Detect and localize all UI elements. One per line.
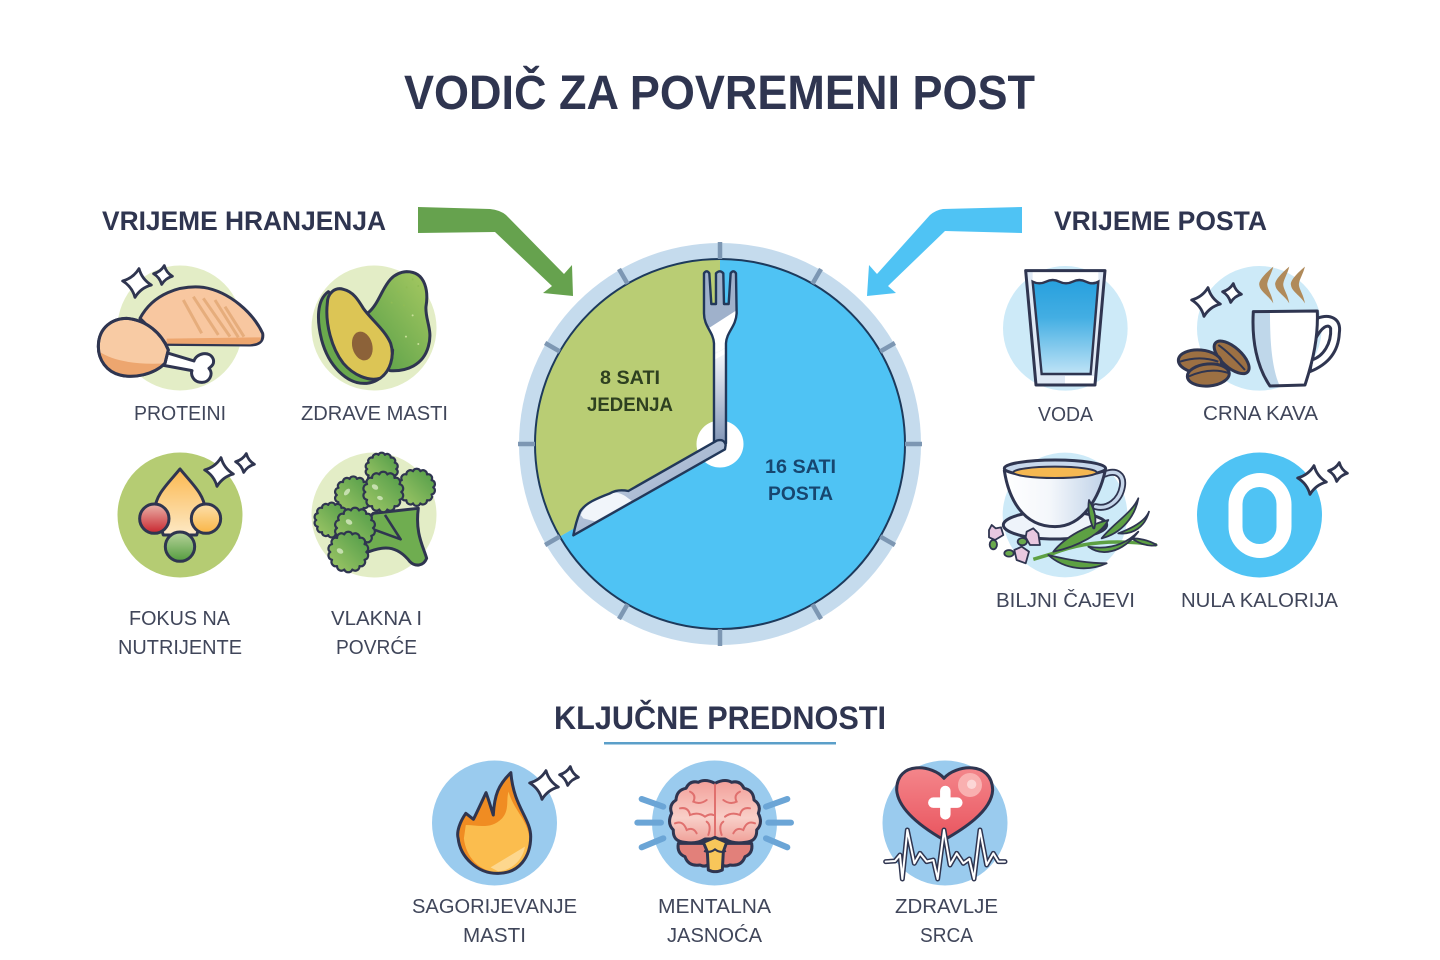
item: zero calories: [1181, 452, 1349, 612]
label: 16 hours fasting: POSTA: [768, 484, 833, 505]
label: 8 hours eating: JEDENJA: [587, 395, 673, 416]
label: healthy fats: ZDRAVE MASTI: [301, 403, 448, 425]
panel: key benefits: [412, 700, 1008, 947]
item: water: [1003, 266, 1128, 426]
icon: tea cup and herbs: [989, 453, 1157, 577]
label: fibre and vegetables: POVRĆE: [336, 636, 417, 659]
icon: glass of water: [1003, 266, 1128, 391]
icon: avocado: [312, 266, 436, 390]
item: nutrient focus: [118, 452, 256, 659]
label: fibre and vegetables: VLAKNA I: [331, 608, 422, 630]
label: 8 hours eating: 8 SATI: [600, 368, 660, 389]
arrow: green eating arrow: [418, 207, 573, 296]
label: water: VODA: [1038, 404, 1094, 426]
item: fibre and vegetables: [312, 452, 436, 659]
item: healthy fats: [301, 266, 448, 425]
label: mental clarity: [658, 896, 772, 947]
item: fat burning: [412, 760, 580, 947]
label: herbal teas: BILJNI ČAJEVI: [996, 589, 1135, 612]
label: nutrient focus: [118, 608, 242, 659]
icon: knife hand: [573, 440, 726, 535]
panel: eating time: [98, 206, 448, 659]
label: fat burning: MASTI: [463, 925, 526, 947]
heading: key benefits: KLJUČNE PREDNOSTI: [554, 700, 886, 736]
clock hands: fork and knife: [573, 271, 737, 535]
icon: coffee mug and beans: [1177, 266, 1340, 391]
label: fibre and vegetables: [331, 608, 422, 659]
label: black coffee: CRNA KAVA: [1203, 403, 1319, 425]
icon: nutrient drop: [118, 452, 256, 578]
label: nutrient focus: NUTRIJENTE: [118, 637, 242, 659]
label: zero calories: NULA KALORIJA: [1181, 590, 1339, 612]
label: mental clarity: JASNOĆA: [667, 924, 763, 947]
arrow: blue fasting arrow: [867, 207, 1022, 296]
label: heart health: [895, 896, 998, 947]
icon: broccoli: [312, 452, 436, 578]
panel: fasting time: [989, 206, 1349, 612]
icon: flame: [432, 760, 580, 886]
label: nutrient focus: FOKUS NA: [129, 608, 231, 630]
clock outer ring: [519, 243, 921, 645]
label: 8 hours eating: [587, 368, 673, 416]
item: black coffee: [1177, 266, 1340, 425]
icon: chicken: [98, 264, 263, 390]
item: herbal teas: [989, 453, 1157, 612]
chart: 16:8 fasting clock: [518, 242, 922, 646]
label: proteins: PROTEINI: [134, 403, 226, 425]
icon: brain: [637, 760, 791, 886]
title: VODIČ ZA POVREMENI POST: [404, 65, 1035, 120]
label: heart health: SRCA: [920, 925, 974, 947]
label: fat burning: [412, 896, 577, 947]
item: proteins: [98, 264, 263, 425]
heading: fasting time: VRIJEME POSTA: [1054, 206, 1267, 236]
segment: 16 hours fasting: [560, 259, 905, 629]
icon: heart with heartbeat: [882, 760, 1008, 886]
label: heart health: ZDRAVLJE: [895, 896, 998, 918]
label: mental clarity: MENTALNA: [658, 896, 772, 918]
heading: eating time: VRIJEME HRANJENJA: [102, 206, 386, 236]
icon: zero: [1197, 452, 1349, 578]
label: 16 hours fasting: [765, 457, 836, 505]
label: 16 hours fasting: 16 SATI: [765, 457, 836, 478]
icon: fork hand: [704, 271, 737, 443]
label: fat burning: SAGORIJEVANJE: [412, 896, 577, 918]
item: heart health: [882, 760, 1008, 947]
sparkles: [1190, 282, 1243, 318]
segment: 8 hours eating: [535, 259, 720, 536]
item: mental clarity: [637, 760, 791, 947]
